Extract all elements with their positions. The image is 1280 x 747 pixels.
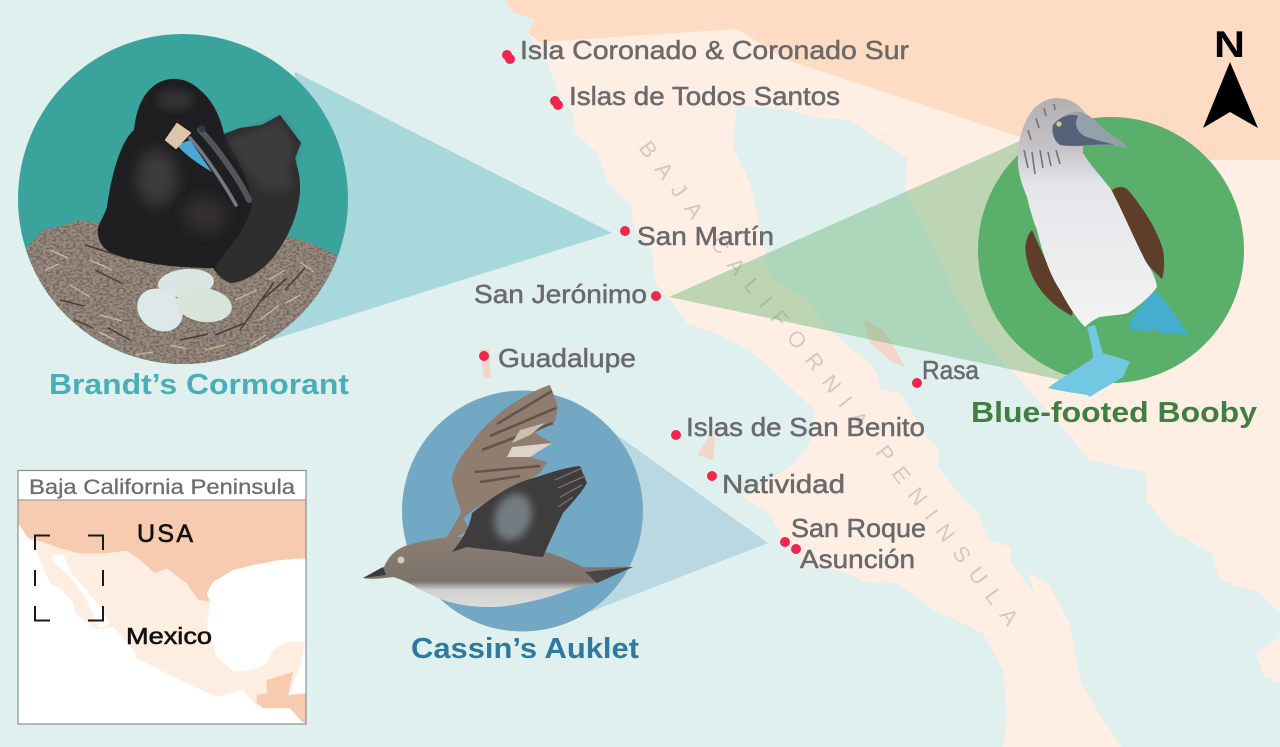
icon: booby near wing — [1112, 187, 1164, 279]
islands — [480, 318, 905, 460]
icon: booby body — [1018, 98, 1157, 327]
icon: booby far wing — [1025, 230, 1073, 316]
icon: cormorant wing — [215, 115, 301, 283]
peninsula label: BAJA CALIFORNIA PENINSULA — [639, 140, 1016, 627]
heading: Cassin's Auklet: Cassin’s Auklet — [411, 633, 639, 665]
icon: auklet near wing — [452, 466, 587, 557]
inset: Gulf of California — [52, 555, 110, 628]
icon: north arrow — [1203, 24, 1258, 128]
land: Mexico and Baja California — [528, 29, 1280, 747]
location labels: Islas de Todos Santos — [569, 81, 840, 111]
location labels: San Martín — [637, 221, 774, 251]
icon: booby bill and mask — [1052, 112, 1127, 148]
icon: cormorant bill — [166, 124, 249, 205]
icon: north arrow: N — [1214, 24, 1245, 65]
icon: cormorant body — [98, 79, 301, 283]
inset label: USA: USA — [137, 520, 193, 548]
heading: Blue-footed Booby: Blue-footed Booby — [971, 397, 1257, 429]
icon: auklet far wing — [440, 385, 558, 545]
location labels: San Jerónimo — [474, 279, 647, 309]
inset: extent brackets — [35, 536, 103, 620]
callout wedge: Cassin's Auklet — [590, 430, 768, 612]
location labels: Isla Coronado & Coronado Sur — [520, 35, 909, 65]
panel: Brandt's Cormorant illustration — [18, 34, 348, 380]
location labels: Rasa — [922, 355, 980, 385]
panel: Cassin's Auklet illustration — [363, 385, 643, 632]
panel: Blue-footed Booby illustration — [978, 98, 1244, 397]
location labels: Islas de San Benito — [686, 412, 925, 442]
heading: Brandt's Cormorant: Brandt’s Cormorant — [49, 369, 349, 401]
icon: auklet body — [363, 536, 633, 607]
location labels: Natividad — [722, 469, 845, 499]
inset: Mexico — [28, 538, 305, 707]
location labels: Guadalupe — [498, 343, 636, 373]
callout wedge: Blue-footed Booby — [669, 140, 1066, 381]
icon: nest — [27, 220, 337, 380]
inset: USA — [18, 500, 306, 602]
inset frame — [18, 470, 306, 724]
land: Mexico blob, east edge — [1256, 637, 1280, 683]
icon: booby foot, raised — [1128, 291, 1188, 335]
inset label: Mexico: Mexico — [126, 623, 212, 649]
location labels — [474, 35, 980, 574]
site markers — [479, 50, 922, 554]
callout wedge: Brandt's Cormorant — [268, 72, 612, 341]
icon: booby leg and foot — [1048, 325, 1130, 397]
panel: inset locator map — [18, 470, 306, 724]
icon: eggs — [129, 267, 234, 340]
inset: Central America — [257, 672, 306, 723]
location labels: Asunción — [800, 544, 915, 574]
land: United States — [505, 0, 1280, 160]
location labels: San Roque — [791, 513, 926, 543]
inset title: Baja California Peninsula — [29, 476, 295, 499]
